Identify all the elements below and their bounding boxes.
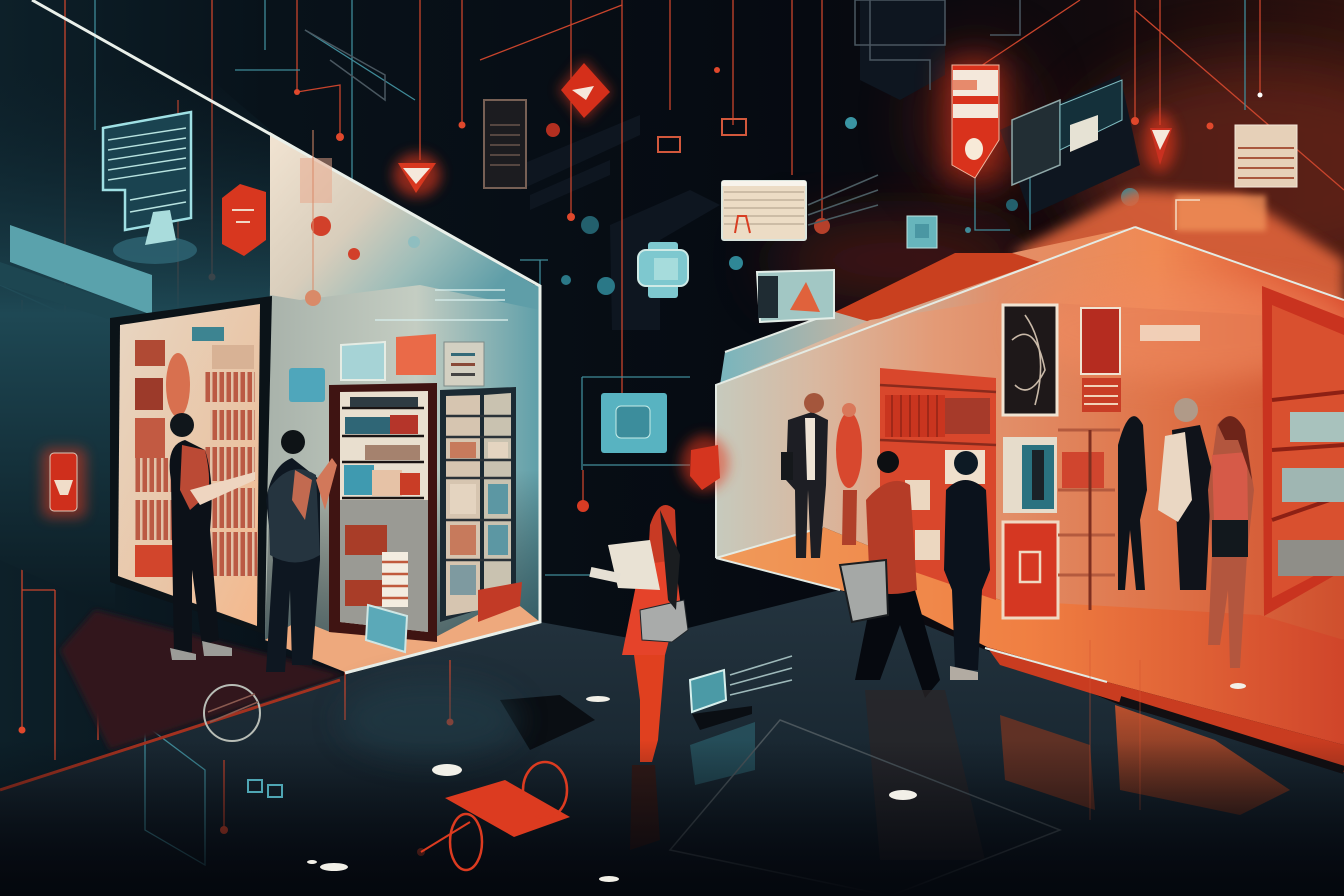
person: suited man in back [781, 393, 828, 558]
right store ceiling [720, 227, 1344, 385]
person: shopper in red jacket with bag [840, 451, 940, 698]
person: left man in dark jacket [266, 430, 337, 672]
icon: small teal square [907, 216, 937, 248]
glass frame [716, 227, 1344, 682]
store upper wall [270, 132, 540, 310]
icon: cream floating card [722, 175, 878, 240]
icon: red cart [421, 762, 570, 870]
hanging pictures [1003, 305, 1121, 618]
icon: glowing triangle left [393, 153, 441, 197]
icon: small teal link [248, 780, 282, 797]
red ceiling fold [835, 253, 1040, 322]
person: man with white coat [1158, 398, 1212, 590]
right store floor [716, 527, 1344, 745]
icon: glowing red capsule top right [945, 60, 1003, 180]
mannequin in red [836, 403, 862, 545]
icon: striped sign top right [1176, 125, 1297, 231]
right lower floor band [987, 647, 1344, 772]
icon: hanging document panel [484, 100, 526, 188]
legs [634, 655, 665, 762]
shop window [110, 296, 272, 634]
teal ceiling beam [10, 225, 152, 315]
floor light spots [307, 683, 1246, 882]
person: left man in red shirt [170, 413, 255, 660]
icon: top faded panels [305, 0, 1020, 100]
left maroon floor [60, 610, 345, 750]
icon: glowing red glove [681, 435, 729, 491]
icon: circle outline on floor [204, 685, 260, 741]
shelves right [205, 345, 257, 576]
icon: small hanging red frames [658, 119, 746, 152]
panel: left glass store [0, 0, 540, 750]
right store wall [716, 300, 1344, 640]
hair [648, 505, 678, 590]
left exterior teal wall [0, 70, 270, 612]
wall screens [289, 290, 508, 402]
panel: right orange store [716, 190, 1344, 772]
icon: glowing red diamond [558, 59, 612, 122]
icon: glowing red tag left [42, 448, 86, 518]
icon: floating floor card [690, 656, 792, 730]
tablet [608, 540, 660, 590]
right bookcase [440, 387, 522, 622]
dress [622, 560, 680, 655]
store floor [265, 598, 540, 672]
right wall shelving [1262, 286, 1344, 616]
center bookcase [329, 383, 437, 652]
icon: teal tablet center [582, 393, 690, 465]
icon: picture card [757, 270, 834, 322]
icon: floating blue card top left [103, 112, 197, 264]
icon: teal hanging device [638, 242, 688, 298]
store lower wall [265, 285, 540, 672]
right upper glow [1012, 190, 1344, 320]
person: woman in pink top [1208, 416, 1254, 668]
icon: glowing triangle right [1144, 112, 1176, 172]
shelves left [135, 340, 185, 577]
person: woman in red holding tablet [589, 505, 688, 762]
person: man in black [944, 451, 990, 680]
icon: red hexagon tag [222, 184, 266, 256]
icon: glass screens top right [1012, 80, 1122, 185]
ceiling light unit [1140, 325, 1200, 341]
wall dots [300, 130, 420, 306]
bottom fade [0, 740, 1344, 896]
shoulder bag [640, 600, 688, 642]
red bookshelf [880, 368, 996, 600]
round display rack [1058, 430, 1120, 610]
floor reflections [0, 640, 1344, 896]
navy background bands [520, 0, 1140, 330]
person: woman in black dress [1118, 416, 1147, 590]
glass roof edge [32, 0, 540, 673]
